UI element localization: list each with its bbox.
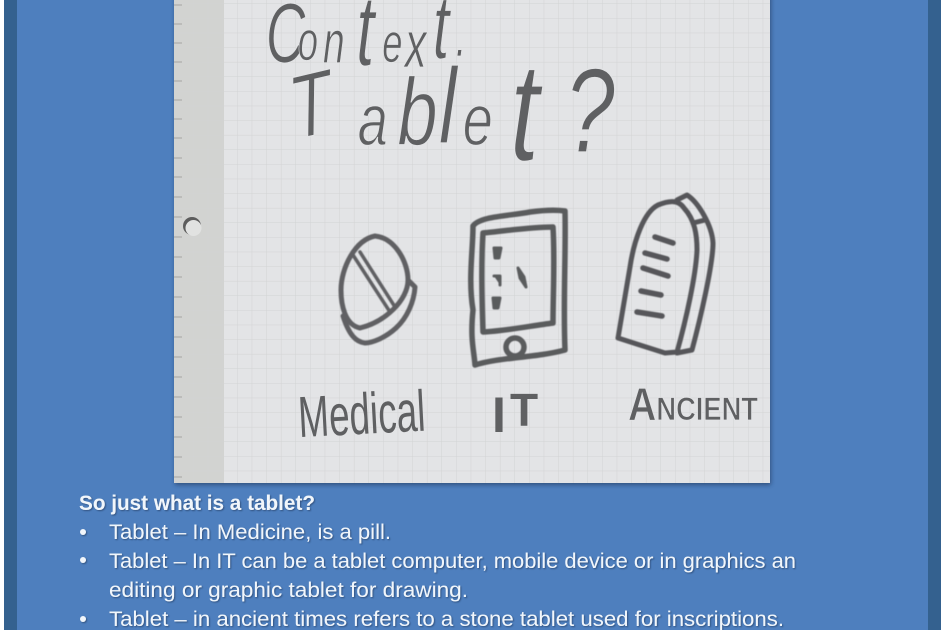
handwritten heading: Tablet?: T — [283, 49, 342, 159]
handwritten heading: Tablet?: b — [398, 58, 438, 165]
handwritten heading: Tablet?: a — [358, 81, 388, 161]
handwritten heading: Context.: x — [403, 8, 428, 81]
handwritten heading: Context.: e — [382, 12, 402, 75]
handwritten heading: Tablet?: ? — [565, 45, 615, 178]
paper sheet — [174, 0, 770, 483]
handwritten label: Ancient: Ancient — [628, 378, 758, 430]
handwritten heading: Tablet?: l — [439, 47, 459, 167]
bullet: medicine: Tablet – In Medicine, is a pill. — [109, 521, 391, 544]
handwritten label: IT: I — [492, 387, 506, 443]
handwritten heading: Context.: o — [298, 10, 318, 73]
handwritten heading: Context.: . — [456, 1, 466, 69]
icon: stone tablet — [618, 195, 713, 353]
icon: punched hole — [183, 217, 202, 236]
handwritten heading: Context.: n — [323, 8, 345, 76]
icon: pill — [341, 236, 415, 343]
handwritten label: Medical: Medical — [297, 379, 427, 450]
bullet: IT: Tablet – In IT can be a tablet computer, mobile device or in graphics an — [109, 550, 796, 573]
handwritten heading: Tablet?: t — [510, 34, 543, 191]
bullet: IT — [80, 550, 796, 602]
handwritten label: IT: T — [510, 384, 538, 436]
photo: graph paper note — [174, 0, 770, 483]
question heading: So just what is a tablet? — [79, 492, 315, 515]
text block: tablet definitions — [79, 492, 796, 630]
icon: tablet computer — [471, 210, 565, 365]
handwritten heading: Tablet?: e — [463, 81, 493, 161]
bullet: IT: editing or graphic tablet for drawing. — [109, 579, 468, 602]
